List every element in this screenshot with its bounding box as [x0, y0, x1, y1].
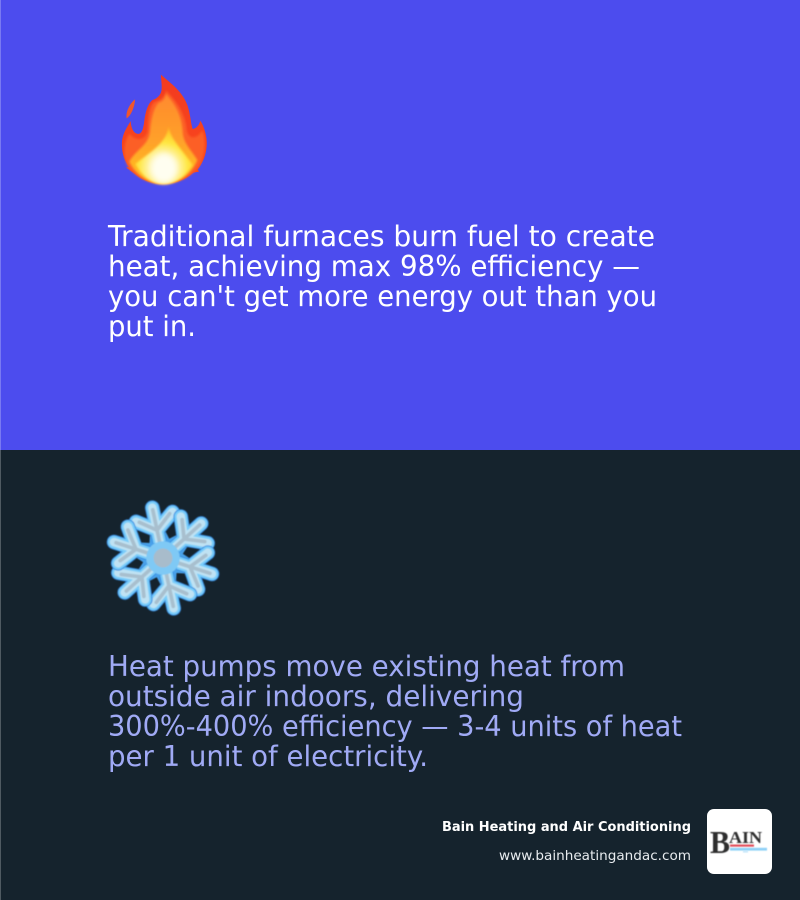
text: heat pump description: per 1 unit of electricity. — [108, 740, 428, 773]
text: website: www.bainheatingandac.com — [499, 849, 691, 864]
left edge line — [0, 0, 1, 900]
text: furnace description: Traditional furnaces burn fuel to create — [107, 220, 655, 253]
logo — [707, 809, 772, 874]
text: furnace description — [107, 220, 657, 343]
text: company name: Bain Heating and Air Conditioning — [442, 820, 691, 835]
text: heat pump description: 300%-400% efficiency — 3-4 units of heat — [108, 710, 682, 743]
text: furnace description: put in. — [108, 310, 196, 343]
logo: AIN — [729, 828, 763, 847]
icon: snowflake — [99, 496, 227, 620]
text: heat pump description — [108, 650, 682, 773]
panel: furnace background — [0, 0, 800, 450]
text: heat pump description: outside air indoors, delivering — [108, 680, 524, 713]
text: heat pump description: Heat pumps move existing heat from — [108, 650, 625, 683]
icon: fire — [122, 75, 207, 184]
text: furnace description: you can't get more energy out than you — [108, 280, 657, 313]
logo: B — [710, 824, 730, 860]
panel: heat pump background — [0, 450, 800, 900]
text: furnace description: heat, achieving max 98% efficiency — — [108, 250, 640, 283]
